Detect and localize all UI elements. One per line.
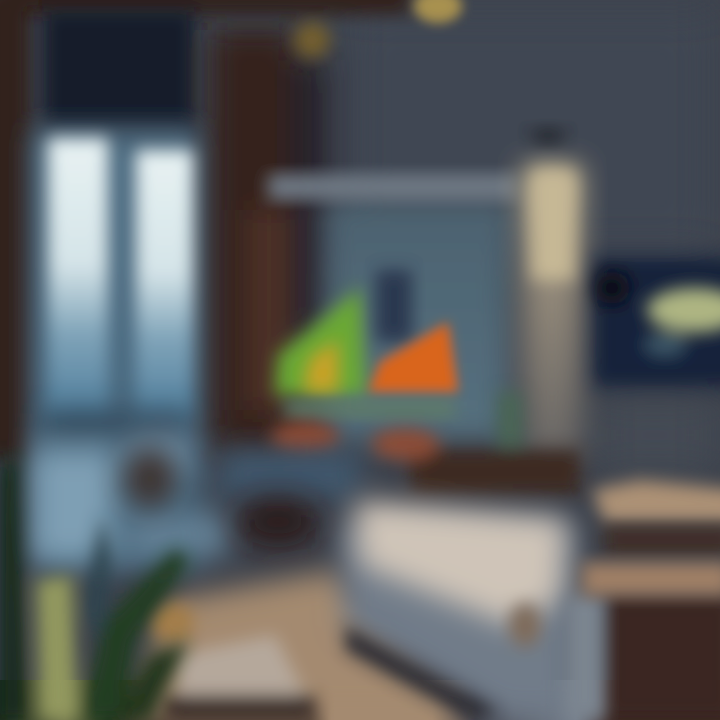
- chart: dark navy peak: [376, 270, 412, 342]
- glass display panel: [268, 174, 518, 440]
- bottom edge base colours: [0, 680, 720, 720]
- wood column centre: [212, 30, 326, 450]
- blue armchair: [130, 450, 360, 555]
- floor: [130, 570, 470, 720]
- dark brown cushion: [124, 448, 320, 548]
- standing lamp column: [522, 127, 582, 460]
- sofa shadow: [345, 625, 500, 720]
- sofa: [340, 500, 575, 720]
- wall TV: [594, 258, 720, 386]
- right cabinet with banded top: [565, 480, 720, 720]
- window lower panes: [32, 412, 192, 560]
- side table and books: [150, 602, 315, 720]
- chart on panel: [275, 270, 458, 418]
- wood column left edge: [0, 0, 30, 460]
- dark window blind: [44, 10, 194, 128]
- shelf bar: [268, 174, 518, 200]
- chart: orange triangle: [368, 322, 458, 392]
- window pane right: [136, 150, 194, 420]
- window: [32, 130, 202, 570]
- ceiling lights: [294, 0, 462, 58]
- ceiling beam: [0, 0, 410, 14]
- TV map highlight: [594, 272, 720, 357]
- wall tint: [354, 10, 699, 463]
- sofa cushion: [355, 500, 565, 625]
- chart: green triangle: [275, 288, 366, 395]
- console with decor: [271, 392, 580, 494]
- plant: [0, 450, 190, 720]
- window pane left: [48, 138, 108, 418]
- chart: yellow wedge: [303, 340, 338, 392]
- chart: lower band: [285, 400, 455, 418]
